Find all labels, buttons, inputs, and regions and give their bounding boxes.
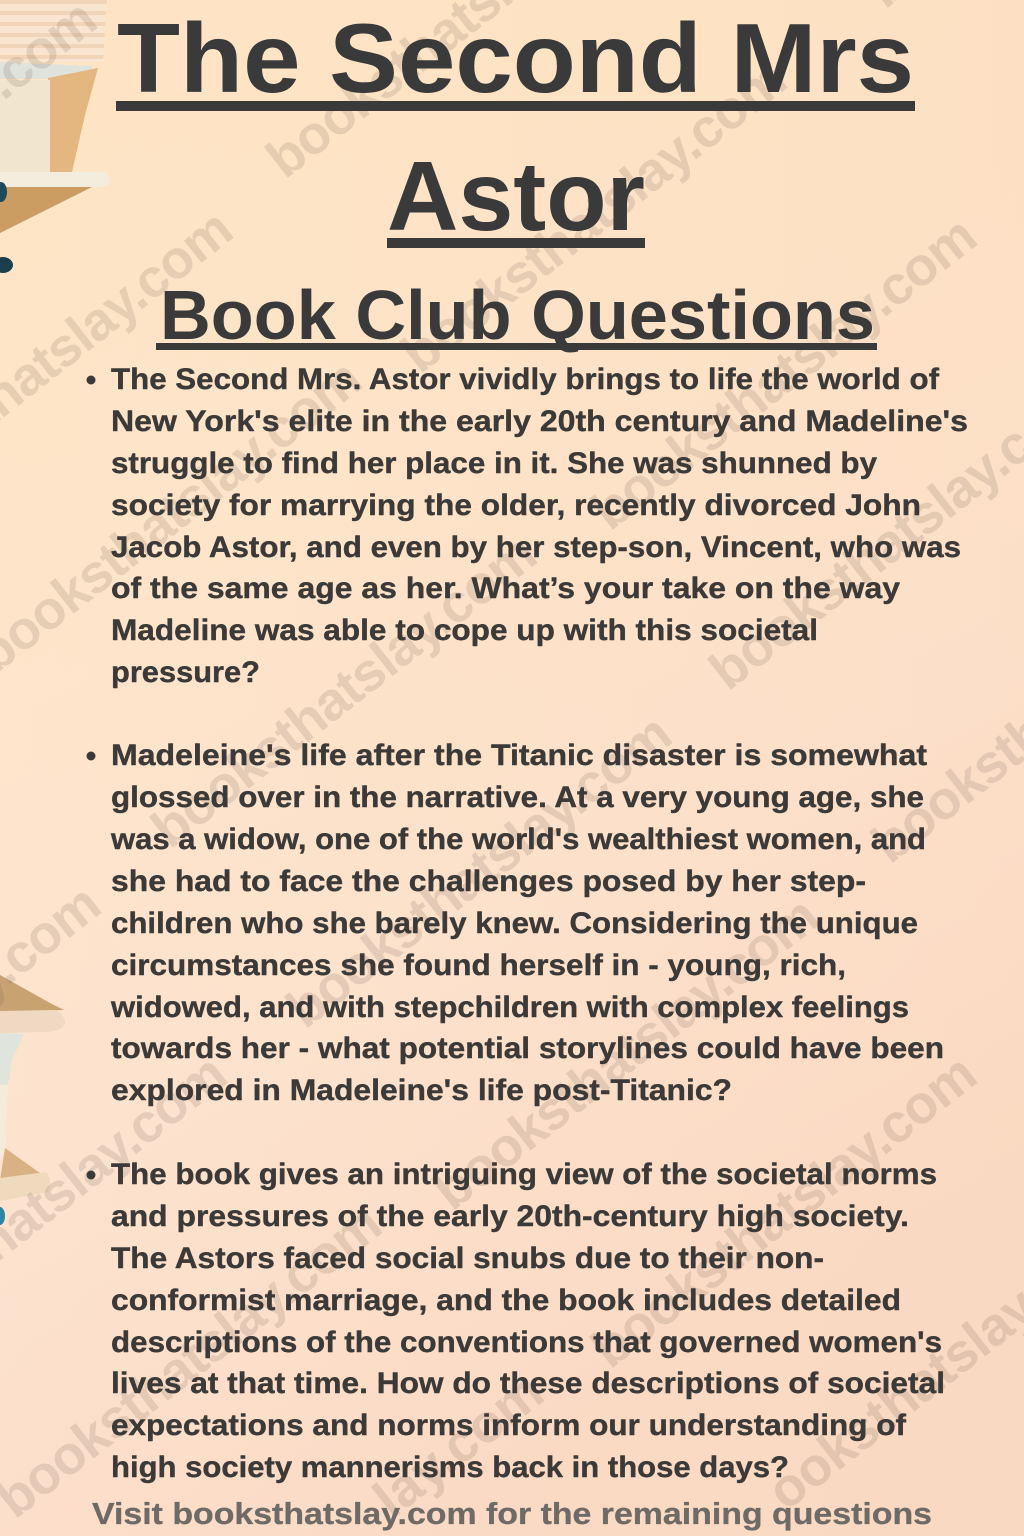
question 1: Jacob Astor, and even by her step-son, Vincent, who was <box>111 531 961 564</box>
question 2: glossed over in the narrative. At a very young age, she <box>111 781 924 814</box>
watermarks: booksthatslay.com <box>275 703 683 1039</box>
watermarks: booksthatslay.com <box>580 1043 988 1379</box>
illustration: lower book stack <box>0 975 65 1225</box>
question 3: lives at that time. How do these descriptions of societal <box>111 1367 945 1400</box>
question 2: children who she barely knew. Considering the unique <box>111 907 918 940</box>
question 3: descriptions of the conventions that governed women's <box>111 1326 942 1359</box>
title: The Second Mrs <box>117 3 914 113</box>
watermarks: booksthatslay.com <box>140 523 548 859</box>
question 2: Madeleine's life after the Titanic disaster is somewhat <box>111 739 927 772</box>
question 2: towards her - what potential storylines could have been <box>111 1032 944 1065</box>
watermarks: booksthatslay.com <box>422 885 830 1221</box>
question 2: explored in Madeleine's life post-Titanic? <box>111 1074 732 1107</box>
question 1: New York's elite in the early 20th century and Madeline's <box>111 405 968 438</box>
question 1 <box>86 363 968 689</box>
subtitle: Book Club Questions <box>160 276 875 354</box>
question 1: Madeline was able to cope up with this societal <box>111 614 818 647</box>
question 3: high society mannerisms back in those days? <box>111 1451 789 1484</box>
title: Astor <box>387 141 645 251</box>
question 3: The Astors faced social snubs due to their non- <box>111 1242 824 1275</box>
question 2: circumstances she found herself in - young, rich, <box>111 949 846 982</box>
watermarks: lay.com <box>362 1361 555 1529</box>
watermarks: booksthatslay.com <box>580 205 988 541</box>
question 1: society for marrying the older, recently divorced John <box>111 489 921 522</box>
title <box>116 3 915 251</box>
footer call to action: Visit booksthatslay.com for the remaining questions <box>92 1496 932 1531</box>
illustration: top book stack <box>0 0 111 273</box>
question 1: The Second Mrs. Astor vividly brings to life the world of <box>111 363 940 396</box>
question 1: of the same age as her. What’s your take on the way <box>111 572 900 605</box>
question 3: and pressures of the early 20th-century high society. <box>111 1200 909 1233</box>
question 2: was a widow, one of the world's wealthiest women, and <box>110 823 926 856</box>
question 1: struggle to find her place in it. She was shunned by <box>111 447 877 480</box>
question 3 <box>86 1158 945 1484</box>
question 2: she had to face the challenges posed by her step- <box>111 865 866 898</box>
question 2 <box>86 739 944 1107</box>
question 3: The book gives an intriguing view of the societal norms <box>111 1158 937 1191</box>
watermarks: booksthatslay.com <box>390 48 798 384</box>
question 2: widowed, and with stepchildren with complex feelings <box>110 991 909 1024</box>
question 3: expectations and norms inform our understanding of <box>111 1409 907 1442</box>
question 1: pressure? <box>111 656 260 689</box>
question 3: conformist marriage, and the book includes detailed <box>111 1284 901 1317</box>
